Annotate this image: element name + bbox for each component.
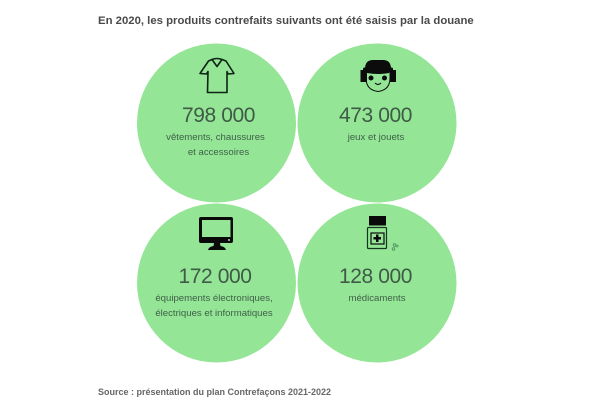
panel: circle medicine (298, 204, 456, 362)
title: En 2020, les produits contrefaits suivants ont été saisis par la douane (98, 15, 474, 27)
label: toys: jeux et jouets (348, 132, 404, 143)
label: medicine: médicaments (348, 293, 406, 304)
number: toys: 473 000 (339, 104, 412, 126)
panel: circle electronics (137, 204, 296, 362)
label: electronics (155, 293, 273, 318)
icon: medicine bottle (368, 216, 398, 250)
icon: computer monitor (199, 217, 233, 250)
source: Source : présentation du plan Contrefaçons 2021-2022 (98, 387, 331, 397)
number: medicine: 128 000 (339, 265, 412, 288)
panel: circle toys (298, 44, 456, 202)
icon: t-shirt (200, 58, 234, 92)
panel: circle clothing (137, 44, 296, 202)
label: clothing: vêtements, chaussures (166, 132, 265, 143)
number: electronics: 172 000 (178, 265, 252, 288)
icon: toy figure head (360, 60, 396, 92)
number: clothing: 798 000 (182, 104, 255, 126)
label: clothing: et accessoires (188, 146, 249, 158)
label: clothing (166, 132, 265, 158)
label: electronics: équipements électroniques, (155, 293, 273, 304)
label: electronics: électriques et informatiques (155, 308, 273, 318)
